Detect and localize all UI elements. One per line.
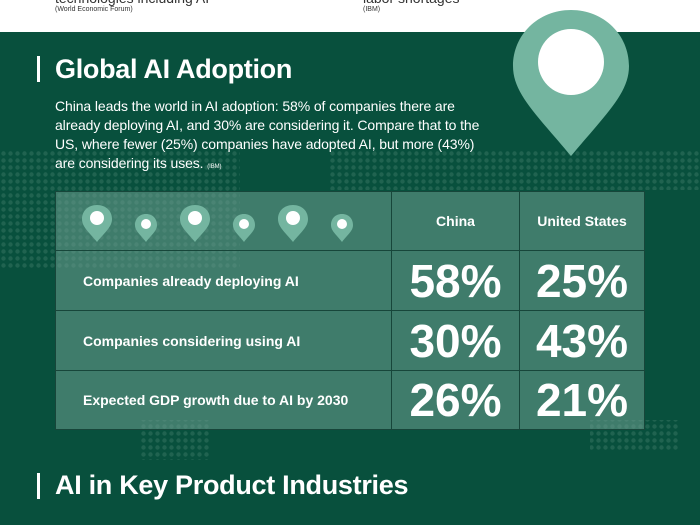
icons: small map pins bbox=[82, 205, 353, 242]
table: China vs US adoption: Companies already deploying AI bbox=[83, 272, 299, 288]
heading: Global AI Adoption bbox=[37, 54, 292, 84]
text: left stat caption: (World Economic Forum) bbox=[55, 6, 133, 13]
text: Global AI Adoption bbox=[55, 54, 292, 84]
table: China vs US adoption bbox=[55, 191, 645, 430]
table: China vs US adoption: Expected GDP growth due to AI by 2030 bbox=[83, 392, 348, 408]
icon: large map pin bbox=[513, 10, 629, 156]
table: China vs US adoption: 25% bbox=[536, 254, 628, 306]
text block: intro paragraph: China leads the world in AI adoption: 58% of companies there are already deploying AI, and 30% are considering it. Compare that to the US, where fewer (25%) companies have adopted AI, but more (43%) are considering its uses. (IBM) bbox=[55, 98, 479, 171]
top white band bbox=[0, 0, 700, 32]
table: China vs US adoption: China bbox=[436, 213, 475, 229]
text: right stat caption bbox=[363, 0, 460, 13]
heading: AI in Key Product Industries bbox=[37, 470, 408, 500]
table: China vs US adoption: 58% bbox=[409, 254, 502, 306]
text: right stat caption: (IBM) bbox=[363, 6, 380, 13]
table: China vs US adoption: 43% bbox=[536, 314, 628, 366]
table: China vs US adoption: Companies considering using AI bbox=[83, 332, 300, 348]
text: left stat caption bbox=[55, 0, 209, 13]
text: AI in Key Product Industries bbox=[55, 470, 408, 500]
table: China vs US adoption: 26% bbox=[409, 374, 502, 426]
table: China vs US adoption: United States bbox=[537, 213, 627, 229]
background dot map bbox=[2, 151, 698, 460]
table: China vs US adoption: 30% bbox=[409, 314, 502, 366]
table: China vs US adoption: 21% bbox=[536, 374, 628, 426]
